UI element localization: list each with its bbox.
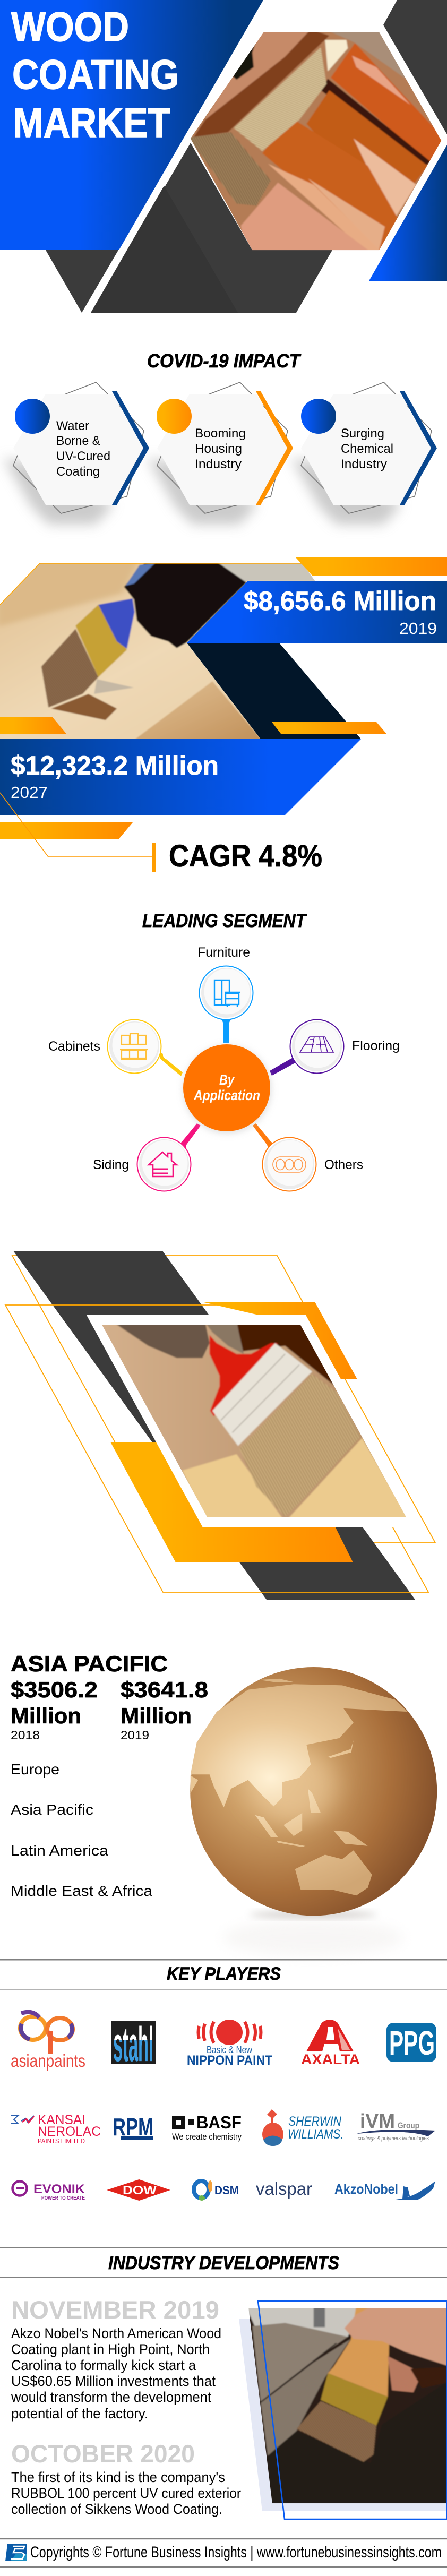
- connector flooring: [270, 1054, 300, 1076]
- hero photo: wood brush and boards: [185, 29, 447, 254]
- text block: November 2019: potential of the factory.: [11, 2406, 148, 2422]
- logo: dsm: DSM: [214, 2184, 239, 2197]
- orange bar lower left: [0, 822, 133, 839]
- logo: basf: [172, 2113, 242, 2142]
- dark parallelogram: [13, 1251, 415, 1600]
- logo: akzonobel: [334, 2181, 435, 2200]
- hero dark shade: [91, 186, 238, 313]
- node cabinets: Cabinets: [48, 1039, 100, 1054]
- heading: leading segment: LEADING SEGMENT: [142, 911, 307, 931]
- card text: Industry: [195, 457, 242, 471]
- connector furniture: [219, 1018, 234, 1043]
- date: November 2019: NOVEMBER 2019: [11, 2296, 219, 2324]
- logo: sherwin williams: [262, 2109, 343, 2146]
- photo outline accent: [0, 563, 302, 605]
- logo: kansai nerolac: KANSAI: [38, 2113, 85, 2127]
- icon: wardrobe and nightstand: [214, 980, 240, 1007]
- logo: ivm group: Group: [398, 2120, 419, 2131]
- value 2018: [11, 1677, 98, 1742]
- card text: [341, 426, 393, 471]
- icon: house: [149, 1152, 177, 1177]
- orange block lower: [110, 1442, 353, 1562]
- orange accent on photo: [0, 717, 66, 734]
- photo: red handled brush: [97, 1321, 410, 1522]
- text block: October 2020: The first of its kind is the company's: [11, 2469, 225, 2485]
- globe: [190, 1667, 437, 1916]
- value 2019: $3641.8: [121, 1677, 208, 1702]
- logo: sherwin williams: WILLIAMS.: [288, 2127, 343, 2142]
- circle badge navy: [301, 399, 336, 434]
- heading: Covid-19 impact: COVID-19 IMPACT: [147, 350, 302, 372]
- panel: market size: [0, 557, 447, 873]
- logo: kansai nerolac: [11, 2113, 101, 2145]
- value 2019: 2019: [121, 1728, 149, 1742]
- value 2019: [121, 1677, 208, 1742]
- circle badge orange: [157, 399, 192, 434]
- value banner 2019: 2019: [399, 619, 437, 638]
- title: Wood Coating Market: WOOD: [11, 3, 129, 50]
- region list: Europe: [11, 1761, 59, 1778]
- value 2018: $3506.2: [11, 1677, 98, 1702]
- connector cabinets: [159, 1052, 183, 1076]
- node furniture: [197, 945, 253, 1019]
- node furniture: Furniture: [197, 945, 250, 960]
- panel: regional section: [11, 1651, 437, 1956]
- node cabinets: [48, 1019, 161, 1074]
- card text: Coating: [56, 465, 100, 479]
- orange outline upper: [12, 1256, 435, 1543]
- chevron accent blue: [112, 391, 149, 505]
- card text: [195, 426, 246, 471]
- orange block top right: [202, 1302, 357, 1379]
- panel: covid card chemical: [291, 382, 437, 525]
- connector siding: [176, 1123, 201, 1151]
- photo outline: [258, 2301, 447, 2519]
- logo: nippon paint: [187, 2020, 272, 2068]
- logo: asian paints: asianpaints: [11, 2051, 85, 2071]
- logo: axalta: AXALTA: [301, 2051, 360, 2067]
- logo: stahl: [111, 2017, 156, 2072]
- region list: Asia Pacific: [11, 1801, 93, 1818]
- hero dark small triangle: [46, 250, 118, 313]
- logo: evonik: POWER TO CREATE: [41, 2195, 85, 2201]
- orange outline lower: [5, 1305, 428, 1592]
- logo: kansai nerolac: NEROLAC: [38, 2124, 101, 2139]
- value banner 2027: $12,323.2 Million: [11, 751, 219, 780]
- region list: Middle East & Africa: [11, 1883, 152, 1899]
- circle badge blue: [15, 399, 50, 434]
- card text: Chemical: [341, 442, 393, 456]
- CAGR callout: [0, 793, 322, 873]
- heading: key players: KEY PLAYERS: [167, 1964, 281, 1984]
- hero blue bottom right shape: [369, 145, 447, 281]
- value 2018: Million: [11, 1703, 81, 1728]
- value banner 2027: [0, 739, 361, 815]
- hero blue panel: [0, 0, 263, 250]
- logo: axalta: [301, 2020, 360, 2067]
- hero panel: [0, 0, 447, 313]
- logo: basf: We create chemistry: [172, 2132, 242, 2142]
- value 2019: Million: [121, 1703, 192, 1728]
- icon: three circles: [273, 1157, 306, 1172]
- heading: Asia Pacific: ASIA PACIFIC: [11, 1651, 168, 1676]
- node flooring: [290, 1019, 400, 1074]
- panel: industry developments: [11, 2296, 447, 2519]
- logo: kansai nerolac: PAINTS LIMITED: [38, 2137, 85, 2145]
- orange accent on navy: [272, 722, 386, 734]
- value banner 2027: 2027: [11, 783, 48, 802]
- logo: valspar: valspar: [256, 2179, 312, 2199]
- card text: Housing: [195, 442, 242, 456]
- logo: ivm group: [357, 2110, 435, 2142]
- icon: fortune business insights logo: [5, 2544, 27, 2561]
- value 2018: 2018: [11, 1728, 40, 1742]
- logo: basf: BASF: [196, 2113, 242, 2132]
- logo: evonik: EVONIK: [33, 2182, 85, 2196]
- logo: asian paints: [11, 2012, 85, 2071]
- logo: dsm: [194, 2180, 239, 2201]
- text block: November 2019: [11, 2325, 221, 2422]
- text block: November 2019: US$60.65 Million investments that: [11, 2373, 216, 2389]
- text block: November 2019: would transform the development: [11, 2389, 211, 2405]
- card text: UV-Cured: [56, 449, 110, 463]
- card text: Surging: [341, 426, 384, 441]
- panel: covid card water borne: [3, 382, 149, 525]
- text block: November 2019: Carolina to formally kick start a: [11, 2357, 196, 2373]
- hub and spoke diagram: by application: [48, 945, 400, 1191]
- logo: nippon paint: NIPPON PAINT: [187, 2053, 272, 2068]
- panel: key player logos: [11, 2012, 436, 2201]
- panel: covid card housing: [147, 382, 293, 525]
- orange bar top right: [296, 557, 447, 576]
- centre circle: By: [219, 1072, 235, 1088]
- centre circle: Application: [193, 1087, 260, 1103]
- centre circle: [183, 1044, 271, 1133]
- title: Wood Coating Market: MARKET: [13, 99, 170, 146]
- CAGR callout: CAGR 4.8%: [169, 839, 322, 873]
- value banner 2019: [187, 581, 447, 643]
- panel: brush image collage: [5, 1251, 435, 1600]
- globe reflection: [223, 1920, 403, 1956]
- hero dark top right shape: [383, 0, 447, 134]
- navy chevron: [187, 643, 361, 739]
- node others: Others: [324, 1157, 363, 1172]
- logo: dow: [107, 2179, 170, 2201]
- title: Wood Coating Market: COATING: [12, 51, 179, 98]
- node flooring: Flooring: [352, 1038, 400, 1053]
- photo: hand with brush on dark wood: [242, 2305, 447, 2506]
- node siding: Siding: [93, 1157, 129, 1172]
- panel: key player logos: stahl: [113, 2017, 153, 2072]
- card text: Booming: [195, 426, 246, 441]
- footer: [5, 2544, 442, 2561]
- logo: akzonobel: AkzoNobel: [334, 2181, 398, 2197]
- logo: ivm group: iVM: [360, 2110, 395, 2133]
- card text: Borne &: [56, 434, 100, 448]
- text block: November 2019: Coating plant in High Point, North: [11, 2341, 210, 2357]
- card text: [56, 419, 110, 479]
- hero dark centre shape: [91, 143, 332, 313]
- node others: [262, 1137, 363, 1191]
- heading: industry developments: INDUSTRY DEVELOPMENTS: [108, 2253, 339, 2273]
- node siding: [93, 1137, 191, 1191]
- logo: ivm group: coatings & polymers technologies: [358, 2135, 429, 2142]
- text block: October 2020: collection of Sikkens Wood Coating.: [11, 2501, 222, 2517]
- icon: floor boards: [300, 1037, 333, 1052]
- globe shadow: [250, 1911, 377, 1918]
- logo: evonik: [13, 2181, 85, 2201]
- region list: Latin America: [11, 1842, 108, 1859]
- chevron accent navy: [400, 391, 437, 505]
- photo backdrop: [239, 2319, 447, 2511]
- card text: Water: [56, 419, 89, 433]
- icon: cabinets: [120, 1034, 148, 1059]
- region list: [11, 1761, 152, 1899]
- date: October 2020: OCTOBER 2020: [11, 2440, 195, 2468]
- logo: sherwin williams: SHERWIN: [288, 2114, 342, 2129]
- text block: November 2019: Akzo Nobel's North American Wood: [11, 2325, 221, 2341]
- text block: October 2020: RUBBOL 100 percent UV cured exterior: [11, 2485, 241, 2501]
- white photo frame: [87, 1315, 422, 1527]
- value banner 2019: $8,656.6 Million: [244, 586, 436, 616]
- connector others: [253, 1123, 277, 1151]
- logo: nippon paint: Basic & New: [207, 2045, 253, 2055]
- logo: rpm: RPM: [113, 2113, 153, 2141]
- photo: brush on wood with gloved hand: [0, 560, 322, 742]
- card text: Industry: [341, 457, 387, 471]
- title: Wood Coating Market: [11, 3, 179, 146]
- text block: October 2020: [11, 2469, 241, 2517]
- chevron accent orange: [256, 391, 293, 505]
- logo: dow: DOW: [123, 2183, 157, 2197]
